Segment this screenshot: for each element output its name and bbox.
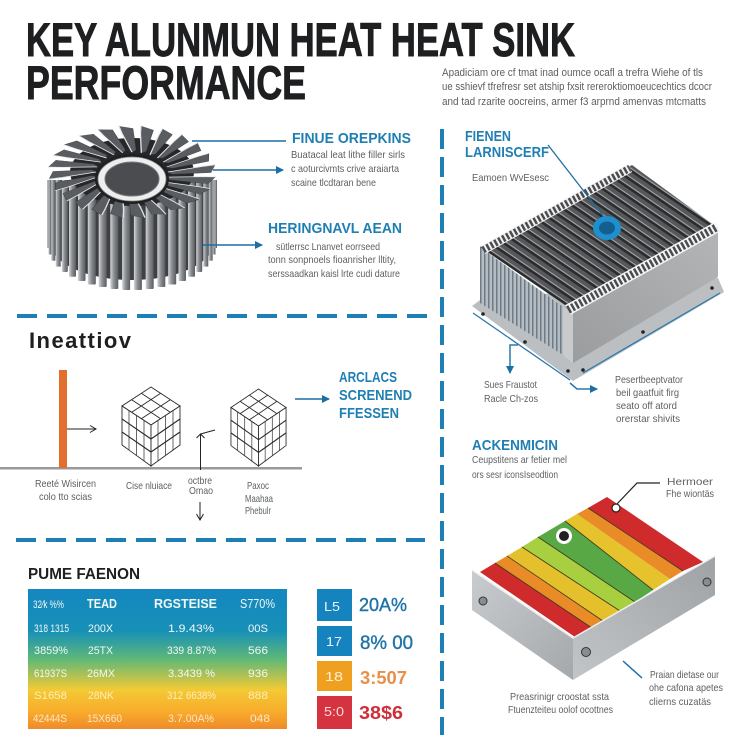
- table rows: 312 6638%: [167, 690, 216, 702]
- icon: blue sensor dot: [548, 145, 621, 240]
- callout: base text: [268, 220, 402, 280]
- stat: red: [317, 696, 403, 729]
- caption: lower right: Praian dietase our: [650, 669, 719, 681]
- result label: SCRENEND: [339, 387, 412, 404]
- table rows: 3.7.00A%: [168, 713, 214, 725]
- section dividers: [16, 129, 442, 735]
- caption: lower right: ohe cafona apetes: [649, 682, 723, 694]
- caption: marker: Fhe wiontäs: [666, 488, 714, 500]
- caption: lower center: Ftuenzteiteu oolof ocottnes: [508, 704, 613, 716]
- heading: ACKENMICIN: [472, 437, 558, 454]
- callout: fin text: c aoturcivmts crive araiarta: [291, 163, 399, 175]
- arrow: to result: [295, 398, 329, 400]
- intro paragraph: and tad rzarite oocreins, armer f3 arprnd amenvas mtcmatts: [442, 96, 706, 108]
- table rows: 200X: [88, 623, 114, 635]
- table rows: 3859%: [34, 645, 68, 657]
- callout: fin text: FINUE OREPKINS: [292, 130, 411, 147]
- orange heat source bar: [59, 370, 67, 468]
- diagram captions: Cise nluiace: [126, 480, 172, 492]
- stat: red: 38$6: [359, 703, 403, 723]
- icon: rectangular heat sink: [472, 165, 724, 381]
- caption: base right: beil gaatfuit firg: [616, 387, 679, 399]
- table rows: [33, 623, 270, 725]
- caption: base left: [484, 379, 538, 405]
- intro text: Ceupstitens ar fetier mel: [472, 454, 567, 466]
- callout: fin text: [291, 130, 411, 189]
- heading: PUME FAENON: [28, 566, 140, 583]
- gradient table: [28, 589, 287, 729]
- arrow: from source: [67, 428, 96, 430]
- heading: FIENEN: [465, 128, 511, 145]
- callout: base text: serssaadkan kaisl lrte cudi dature: [268, 268, 400, 280]
- icon: left cube: [122, 387, 180, 466]
- caption: lower right: [649, 669, 723, 708]
- leader: top right marker: [612, 483, 660, 512]
- diagram captions: [35, 475, 273, 517]
- table rows: 26MX: [87, 668, 116, 680]
- panel: inertia diagram: [0, 328, 412, 520]
- panel: color tray: [472, 437, 723, 716]
- table rows: 566: [248, 645, 268, 657]
- heading: LARNISCERF: [465, 144, 549, 161]
- caption: base right: orerstar shivits: [616, 413, 680, 425]
- panel: rectangular heat sink: [465, 128, 724, 425]
- diagram captions: Omao: [189, 485, 213, 497]
- icon: radial heat sink: [47, 126, 217, 290]
- table header row: TEAD: [87, 596, 117, 611]
- result label: [339, 369, 412, 422]
- table rows: 25TX: [88, 645, 114, 657]
- table header row: 32⁄k %%: [33, 599, 64, 611]
- table rows: 3.3439 %: [168, 668, 215, 680]
- callout: base text: tonn sonpnoels fioanrisher lltity,: [268, 254, 396, 266]
- intro paragraph: Apadiciam ore cf tmat inad oumce ocafl a trefra Wiehe of tls: [442, 67, 703, 79]
- callout: base text: HERINGNAVL AEAN: [268, 220, 402, 237]
- diagram captions: colo tto scias: [39, 491, 92, 503]
- caption: base right: seato off atord: [616, 400, 677, 412]
- table rows: 888: [248, 690, 268, 702]
- table rows: 00S: [248, 623, 268, 635]
- callout: fin text: Buatacal leat lithe filler sirls: [291, 149, 405, 161]
- heading: [465, 128, 549, 161]
- title: KEY ALUNMUN HEAT HEAT SINK: [26, 13, 575, 66]
- intro text: [472, 454, 567, 481]
- icon: striped tray: [472, 497, 715, 680]
- arrow: base right: [570, 383, 597, 389]
- table rows: 42444S: [33, 713, 67, 725]
- arrow: lower callout: [203, 244, 262, 246]
- arrow: down flow: [199, 502, 201, 520]
- table rows: 318 1315: [34, 623, 69, 635]
- caption: base right: [615, 374, 683, 425]
- table header row: [33, 596, 275, 611]
- table rows: 61937S: [34, 668, 67, 680]
- stat: blue one: [317, 589, 407, 621]
- caption: lower center: [508, 691, 613, 716]
- title: [26, 13, 575, 109]
- marker: black badge: [556, 528, 572, 544]
- intro text: ors sesr iconsIseodtion: [472, 469, 558, 481]
- caption: base left: Sues Fraustot: [484, 379, 537, 391]
- table rows: S1658: [34, 690, 67, 702]
- caption: base right: Pesertbeeptvator: [615, 374, 683, 386]
- table rows: 339 8.87%: [167, 645, 216, 657]
- stat: red: 5:0: [324, 704, 344, 719]
- panel: round heat sink: [47, 126, 411, 290]
- table header row: S770%: [240, 596, 275, 611]
- caption: marker: Hermoer: [667, 476, 714, 488]
- diagram captions: Reeté Wisircen: [35, 478, 96, 490]
- leader: lower blue: [623, 661, 642, 678]
- result label: FFESSEN: [339, 405, 399, 422]
- table rows: 28NK: [88, 690, 115, 702]
- stat: orange: 3:507: [360, 668, 407, 688]
- caption: lower center: Preasrinigr croostat ssta: [510, 691, 609, 703]
- title: PERFORMANCE: [26, 56, 306, 109]
- stat: blue one: 20A%: [359, 595, 407, 615]
- callout: fin text: scaine tlcdtaran bene: [291, 177, 376, 189]
- stat: blue two: 17: [326, 634, 342, 649]
- caption: lower right: clierns cuzatäs: [649, 696, 711, 708]
- panel: performance table: [28, 566, 413, 729]
- table rows: 1.9.43%: [168, 623, 214, 635]
- caption: base left: Racle Ch-zos: [484, 393, 538, 405]
- arrow: middle callout: [213, 169, 283, 171]
- table header row: RGSTEISE: [154, 596, 217, 611]
- stat: blue two: [317, 626, 413, 656]
- intro paragraph: [442, 67, 712, 108]
- caption: marker: [666, 476, 714, 500]
- stat: orange: [317, 661, 407, 691]
- stat: blue one: L5: [324, 599, 340, 614]
- diagram captions: Maahaa: [245, 493, 273, 505]
- heading: Ineattiov: [29, 328, 132, 353]
- arrow: up flow: [196, 430, 215, 470]
- diagram captions: Paxoc: [247, 480, 269, 492]
- intro paragraph: ue sshievf tfrefresr set atship fxsit rereroktiomoeucechtics dcocr: [442, 81, 712, 93]
- diagram captions: Phebulr: [245, 505, 271, 517]
- diagram captions: octbre: [188, 475, 212, 487]
- table rows: 15X660: [87, 713, 122, 725]
- icon: right cube: [231, 389, 286, 466]
- arrow: base down: [510, 345, 518, 373]
- arrow: top callout leader: [192, 140, 286, 142]
- caption: top: Eamoen WvEsesc: [472, 172, 549, 184]
- baseline: [0, 467, 302, 470]
- stat: blue two: 8% 00: [360, 633, 413, 654]
- callout: base text: sütlerrsc Lnanvet eorrseed: [276, 241, 380, 253]
- result label: ARCLACS: [339, 369, 397, 386]
- table rows: 048: [250, 713, 270, 725]
- table rows: 936: [248, 668, 268, 680]
- stat: orange: 18: [325, 669, 343, 684]
